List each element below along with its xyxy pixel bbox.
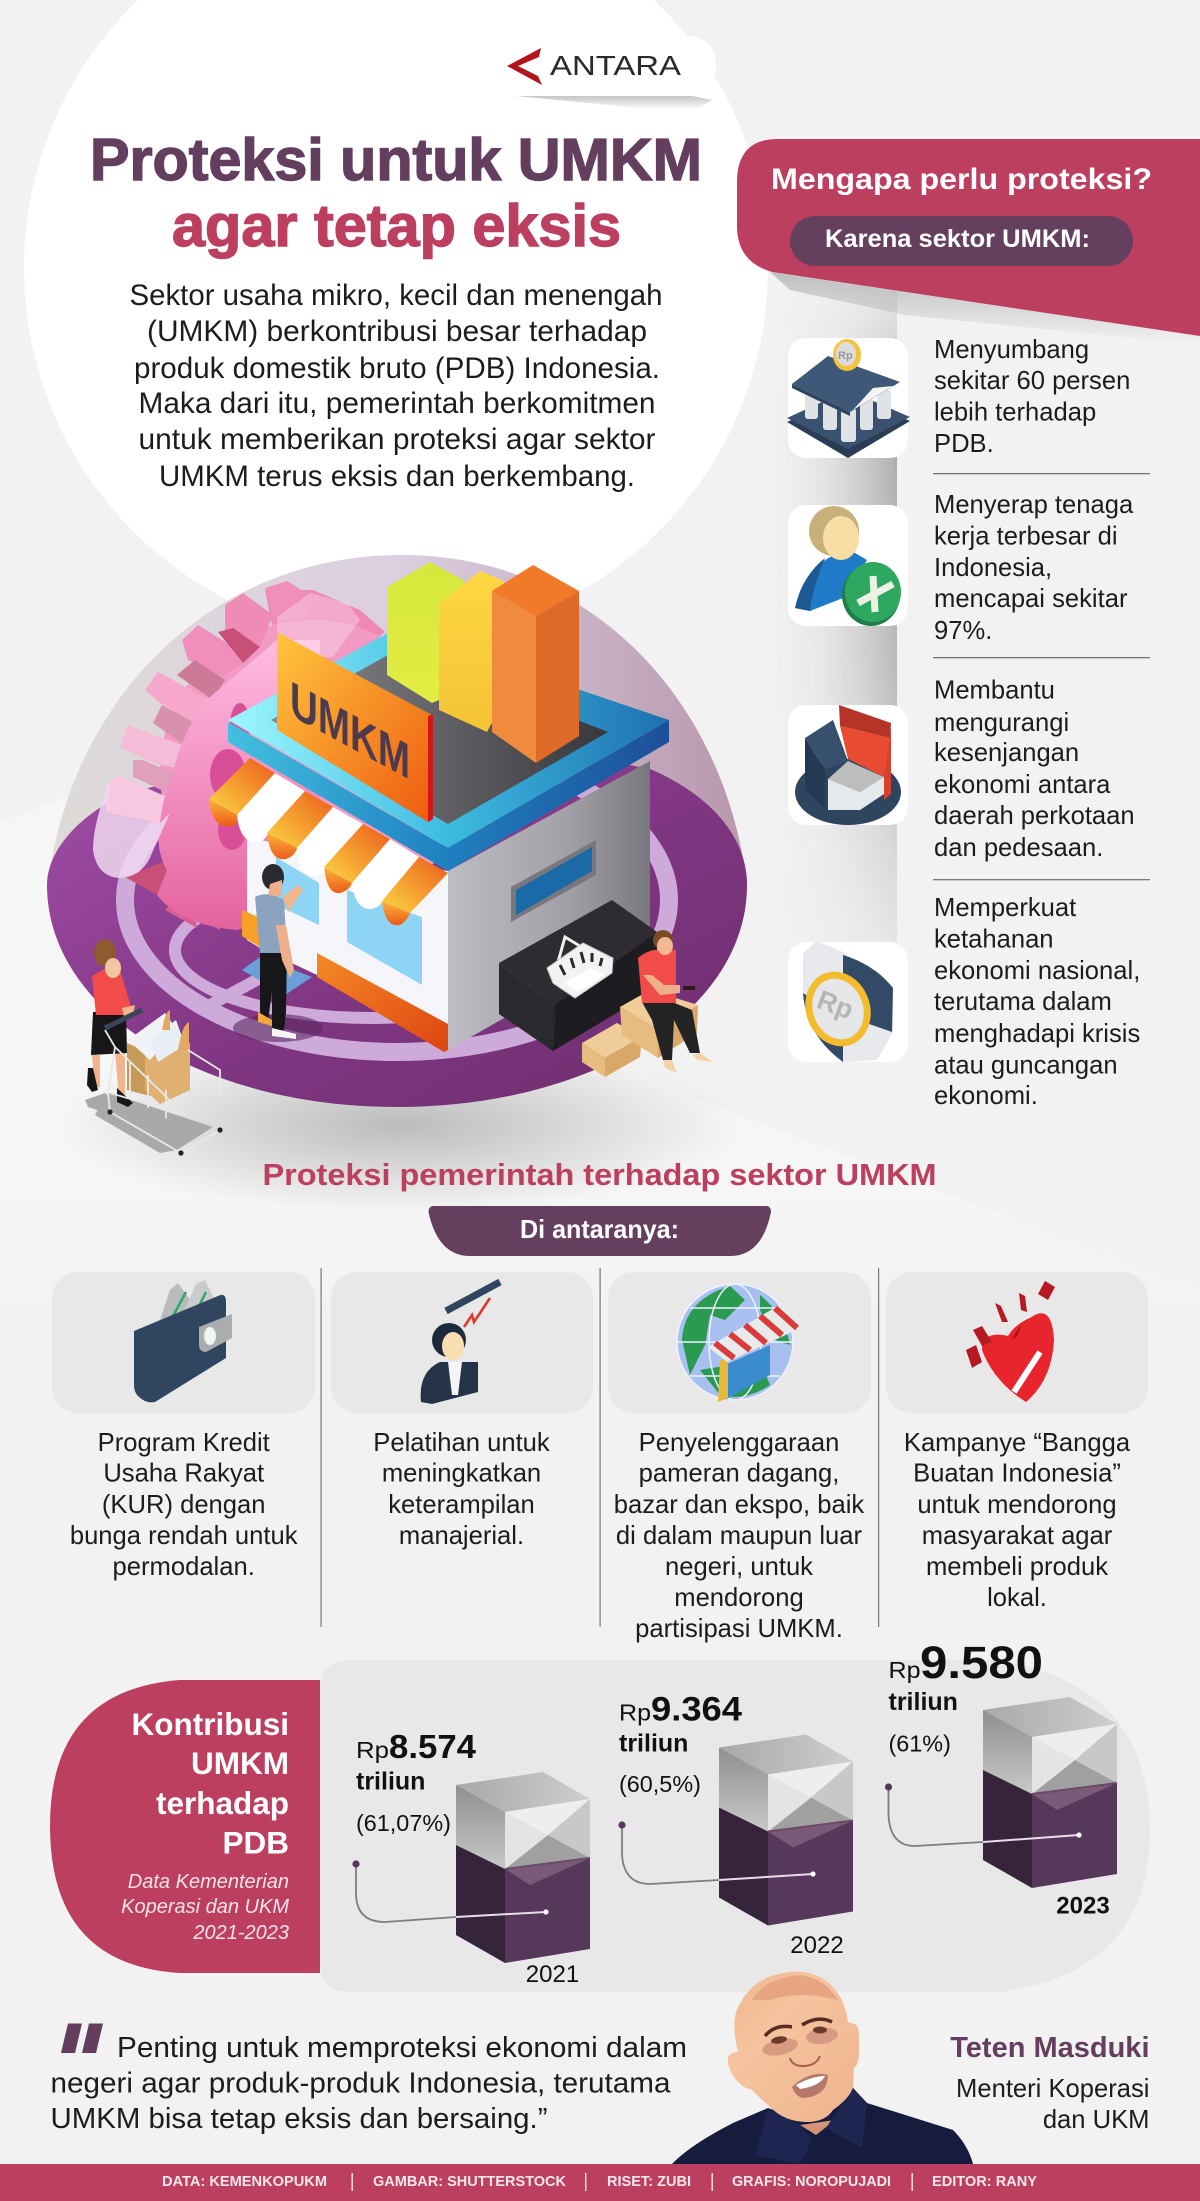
text: KUR: permodalan. [113, 1553, 255, 1581]
reason 1 text: PDB. [934, 430, 994, 458]
reason 2 text: Indonesia, [934, 554, 1052, 582]
portrait: Teten Masduki [672, 1972, 973, 2164]
panel: Kontribusi UMKM [50, 1680, 320, 1973]
footer credits: DATA: KEMENKOPUKM [162, 2173, 327, 2190]
title: Proteksi untuk UMKM [90, 127, 702, 193]
text: trade fairs: di dalam maupun luar [616, 1522, 863, 1550]
reason 4 text [934, 894, 1140, 1110]
footer credits: RISET: ZUBI [607, 2173, 691, 2190]
connector 2022 [618, 1821, 816, 1884]
panel: training [331, 1272, 593, 1550]
footer credits: EDITOR: RANY [932, 2173, 1037, 2190]
store windows [276, 857, 422, 985]
text: trade fairs [614, 1429, 864, 1643]
text: campaign: Kampanye “Bangga [904, 1429, 1131, 1457]
year labels: 2022 [790, 1932, 844, 1959]
text: trade fairs: pameran dagang, [639, 1460, 839, 1488]
text: KUR: (KUR) dengan [102, 1491, 266, 1519]
intro text block: (UMKM) berkontribusi besar terhadap [147, 315, 647, 348]
panel: Kontribusi UMKM: UMKM [191, 1745, 289, 1781]
reason 2 text: mencapai sekitar [934, 585, 1128, 613]
icon: bank with coin [787, 338, 910, 458]
label 2022 [619, 1690, 742, 1797]
text: campaign: masyarakat agar [922, 1522, 1113, 1550]
label 2022: triliun [619, 1730, 688, 1758]
label 2023: Rp [888, 1657, 920, 1683]
text: trade fairs: mendorong [674, 1584, 804, 1612]
basket [547, 937, 613, 998]
heading: government protection: Proteksi pemerintah terhadap sektor UMKM [262, 1157, 936, 1192]
panel: Kontribusi UMKM: 2021-2023 [192, 1922, 289, 1944]
reason 4 text: Memperkuat [934, 894, 1076, 922]
pill: Di antaranya: Di antaranya: [520, 1216, 679, 1244]
sign: UMKM: UMKM [290, 671, 410, 791]
purple disc [47, 720, 747, 1107]
panel: trade fairs [608, 1272, 871, 1643]
icon: pie chart [788, 705, 908, 825]
label 2023: triliun [888, 1688, 958, 1716]
reason 4 text: ketahanan [934, 926, 1054, 954]
footer credits: GRAFIS: NOROPUJADI [732, 2173, 891, 2190]
label 2021: Rp [356, 1737, 389, 1763]
pill: Di antaranya [428, 1206, 771, 1256]
panel: Kontribusi UMKM: Kontribusi [132, 1706, 289, 1742]
intro text block: Maka dari itu, pemerintah berkomitmen [138, 387, 656, 420]
intro text block: untuk memberikan proteksi agar sektor [138, 423, 656, 456]
text: campaign: lokal. [987, 1584, 1047, 1612]
reason 4 text: atau guncangan [934, 1052, 1118, 1080]
icon: rupiah shield: Rp [813, 985, 857, 1025]
reason 3 text: ekonomi antara [934, 771, 1111, 799]
label 2021: 8.574 [389, 1728, 477, 1765]
reason 3 text [934, 677, 1135, 862]
panel: KUR [52, 1272, 315, 1581]
quote text: UMKM bisa tetap eksis dan bersaing.” [50, 2103, 548, 2135]
icon: heart [966, 1281, 1055, 1402]
text: trade fairs: partisipasi UMKM. [635, 1615, 843, 1643]
text: trade fairs: bazar dan ekspo, baik [614, 1491, 864, 1519]
bar 2021 [456, 1772, 590, 1963]
side window [511, 840, 596, 922]
reason 4 text: ekonomi. [934, 1082, 1038, 1110]
text: training [373, 1429, 550, 1550]
text: campaign: untuk mendorong [917, 1491, 1117, 1519]
text: training: Pelatihan untuk [373, 1429, 550, 1457]
label 2022: 9.364 [651, 1690, 742, 1728]
year labels: 2023 [1056, 1893, 1110, 1920]
store roof [228, 720, 669, 871]
quote attribution: Menteri Koperasi [956, 2075, 1150, 2103]
reason 4 text: ekonomi nasional, [934, 957, 1140, 985]
label 2023 [888, 1637, 1043, 1757]
person: standing customer [233, 864, 323, 1042]
label 2022: Rp [619, 1700, 651, 1726]
quote text: Penting untuk memproteksi ekonomi dalam [117, 2032, 687, 2064]
icon: rupiah shield [788, 941, 908, 1062]
text: campaign: Buatan Indonesia” [913, 1460, 1121, 1488]
panel: why protection header: Karena sektor UMKM: [825, 225, 1090, 253]
intro text block: produk domestik bruto (PDB) Indonesia. [134, 352, 660, 385]
label 2023: (61%) [888, 1731, 951, 1757]
icon: globe with stall [677, 1284, 805, 1402]
white circle behind title [24, 0, 768, 640]
panel: Kontribusi UMKM: PDB [222, 1825, 289, 1861]
panel: reasons list [787, 336, 1150, 1110]
quote text: negeri agar produk-produk Indonesia, terutama [50, 2068, 671, 2100]
quote text [50, 2024, 687, 2135]
reason 1 text [934, 336, 1130, 458]
quote attribution [950, 2032, 1150, 2134]
label 2021: triliun [356, 1768, 425, 1796]
text: trade fairs: Penyelenggaraan [639, 1429, 839, 1457]
connector 2023 [885, 1783, 1082, 1846]
text: KUR [70, 1429, 298, 1581]
panel: why protection header: Mengapa perlu proteksi? [771, 163, 1152, 196]
label 2022: (60,5%) [619, 1771, 701, 1797]
black bench [499, 900, 657, 1051]
bar 2022 [719, 1734, 853, 1926]
panel: Kontribusi UMKM: terhadap [156, 1785, 289, 1821]
panel: Bangga Buatan Indonesia [886, 1272, 1148, 1612]
text: campaign: membeli produk [926, 1553, 1108, 1581]
label 2023: 9.580 [920, 1637, 1043, 1688]
text: KUR: bunga rendah untuk [70, 1522, 298, 1550]
intro text block [130, 279, 662, 493]
reason 3 text: daerah perkotaan [934, 802, 1135, 830]
icon: bank with coin: Rp [838, 350, 853, 362]
panel: why protection header [737, 139, 1200, 345]
year labels: 2021 [526, 1961, 579, 1988]
reason 3 text: dan pedesaan. [934, 834, 1103, 862]
reason 3 text: mengurangi [934, 709, 1069, 737]
reason 2 text: kerja terbesar di [934, 522, 1118, 550]
gear [93, 581, 464, 930]
icon: quote mark [61, 2024, 103, 2053]
quote attribution: Teten Masduki [950, 2032, 1150, 2064]
reason 1 text: sekitar 60 persen [934, 367, 1130, 395]
reason 2 text [934, 491, 1134, 645]
reason 3 text: Membantu [934, 677, 1055, 705]
label 2021: (61,07%) [356, 1810, 451, 1836]
title: agar tetap eksis [172, 193, 621, 259]
bar 2023 [983, 1697, 1117, 1888]
illustration: UMKM store on dome [47, 555, 747, 1213]
text: KUR: Program Kredit [98, 1429, 270, 1457]
sign: UMKM [277, 632, 433, 822]
panel: Kontribusi UMKM: Data Kementerian [128, 1871, 289, 1893]
text: campaign [904, 1429, 1131, 1612]
base stripe [317, 953, 448, 1052]
text: training: manajerial. [399, 1522, 524, 1550]
label 2021 [356, 1728, 477, 1836]
awning [209, 758, 448, 925]
reason 4 text: menghadapi krisis [934, 1020, 1140, 1048]
footer credits: GAMBAR: SHUTTERSTOCK [373, 2173, 566, 2190]
text: KUR: Usaha Rakyat [103, 1460, 264, 1488]
logo: ANTARA [484, 36, 716, 110]
icon: worker with plus [788, 505, 908, 626]
connector 2021 [352, 1860, 549, 1922]
icon: wallet [134, 1280, 232, 1402]
store front wall [247, 838, 448, 1047]
year labels [526, 1893, 1110, 1988]
intro text block: UMKM terus eksis dan berkembang. [159, 460, 635, 493]
logo: ANTARA: ANTARA [550, 50, 681, 81]
person: woman with shopping cart [85, 939, 223, 1156]
reason 2 text: 97%. [934, 617, 992, 645]
disc rings [125, 748, 669, 1052]
text: training: meningkatkan [382, 1460, 541, 1488]
dome [48, 555, 747, 885]
reason 3 text: kesenjangan [934, 739, 1079, 767]
footer credits [0, 2164, 1200, 2201]
intro text block: Sektor usaha mikro, kecil dan menengah [130, 279, 662, 312]
reason 2 text: Menyerap tenaga [934, 491, 1134, 519]
chart panel background [320, 1660, 1150, 1992]
person: seated with boxes [582, 930, 713, 1077]
panel: Kontribusi UMKM: Koperasi dan UKM [121, 1896, 289, 1918]
icon: manager with chart [421, 1282, 500, 1404]
quote attribution: dan UKM [1043, 2106, 1150, 2134]
text: training: keterampilan [388, 1491, 535, 1519]
store side wall [448, 761, 650, 1050]
reason 1 text: Menyumbang [934, 336, 1089, 364]
reason 1 text: lebih terhadap [934, 398, 1096, 426]
text: trade fairs: negeri, untuk [665, 1553, 813, 1581]
chart bars on roof [387, 562, 579, 763]
title [90, 127, 702, 259]
reason 4 text: terutama dalam [934, 988, 1112, 1016]
bar chart: PDB contribution [352, 1637, 1117, 1988]
